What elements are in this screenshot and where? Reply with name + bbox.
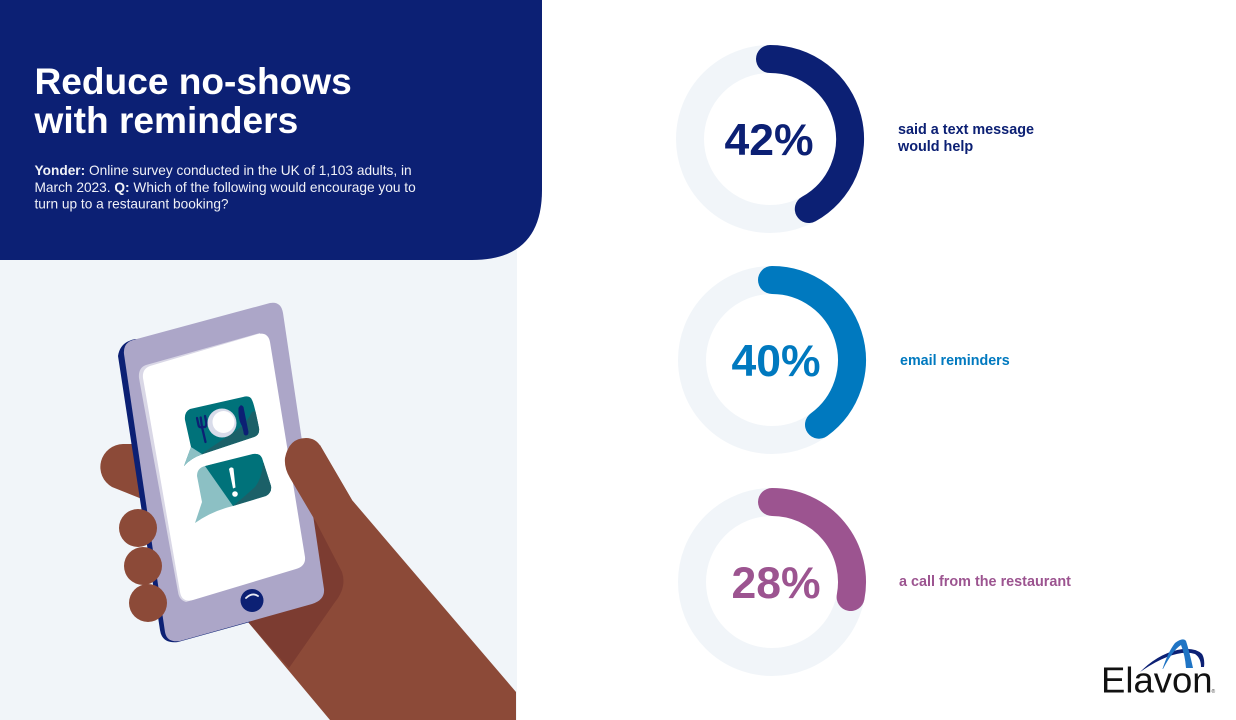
- icon: fork: [197, 416, 206, 442]
- icon: alert bubble: [195, 454, 272, 523]
- panel: header: [0, 0, 542, 260]
- phone: body: [124, 303, 324, 641]
- phone: screen: [143, 334, 305, 601]
- survey description: Yonder: Online survey conducted in the UK of 1,103 adults, in: [34, 163, 412, 178]
- label: text message: would help: [897, 139, 973, 155]
- panel: illustration background: [0, 250, 517, 720]
- label: email: email reminders: [900, 353, 1010, 369]
- label: call: a call from the restaurant: [899, 574, 1071, 590]
- title: with reminders: [34, 99, 298, 141]
- logo: registered mark: ®: [1212, 688, 1216, 695]
- icon: knife: [238, 405, 248, 436]
- value: 28%: 28%: [731, 559, 821, 608]
- phone: screen shadow: [139, 333, 298, 602]
- icon: plate and cutlery bubble: [184, 396, 260, 466]
- illustration: hand holding phone: [100, 303, 516, 720]
- label: text message: said a text message: [898, 122, 1034, 138]
- survey description: March 2023. Q: Which of the following would encourage you to: [34, 180, 416, 195]
- icon: exclamation mark: [229, 467, 236, 488]
- donut: 42% text message: [690, 59, 850, 219]
- phone: [118, 303, 324, 642]
- hand: palm and wrist: [248, 445, 516, 720]
- value: 42%: 42%: [724, 116, 814, 165]
- donut: 28% call: [692, 502, 852, 662]
- hand: index finger: [100, 444, 142, 499]
- icon: plate: [208, 408, 236, 438]
- phone: home button: [240, 589, 264, 612]
- survey description: turn up to a restaurant booking?: [34, 196, 229, 212]
- hand: thumb: [285, 438, 352, 522]
- logo: arch: [1140, 639, 1204, 672]
- phone: navy side: [118, 339, 250, 642]
- hand: palm shadow: [248, 510, 343, 668]
- logo: Elavon: [1101, 639, 1216, 700]
- value: 40%: 40%: [731, 337, 821, 386]
- logo: wordmark: Elavon: [1101, 660, 1213, 700]
- title: Reduce no-shows: [34, 60, 352, 102]
- donut: 40% email: [692, 280, 852, 440]
- hand: fingers: [119, 509, 167, 622]
